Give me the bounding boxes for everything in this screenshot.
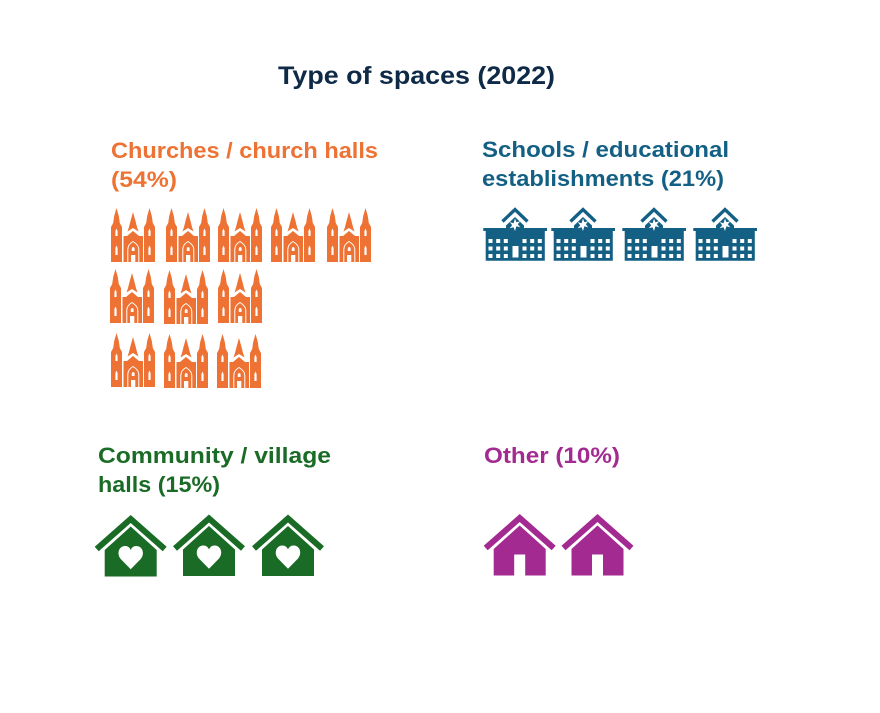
- title: Type of spaces (2022): [278, 62, 555, 90]
- icons: schools: [483, 210, 757, 261]
- icons: community halls: [97, 518, 322, 576]
- icons: churches row 2: [110, 269, 262, 324]
- percentage: churches: (54%): [111, 167, 177, 192]
- icons: churches row 3: [111, 333, 261, 388]
- heading: schools: Schools / educational: [482, 137, 729, 162]
- percentage: community: halls (15%): [98, 472, 220, 497]
- panel: community halls: [97, 443, 331, 576]
- panel: churches: [110, 138, 378, 388]
- heading: churches: Churches / church halls: [111, 138, 378, 163]
- icons: churches row 1: [111, 208, 371, 262]
- heading: other: Other (10%): [484, 443, 620, 468]
- heading: community: Community / village: [98, 443, 331, 468]
- panel: other: [484, 443, 632, 576]
- panel: schools: [482, 137, 757, 261]
- icons: other: [486, 518, 632, 576]
- percentage: schools: establishments (21%): [482, 166, 724, 191]
